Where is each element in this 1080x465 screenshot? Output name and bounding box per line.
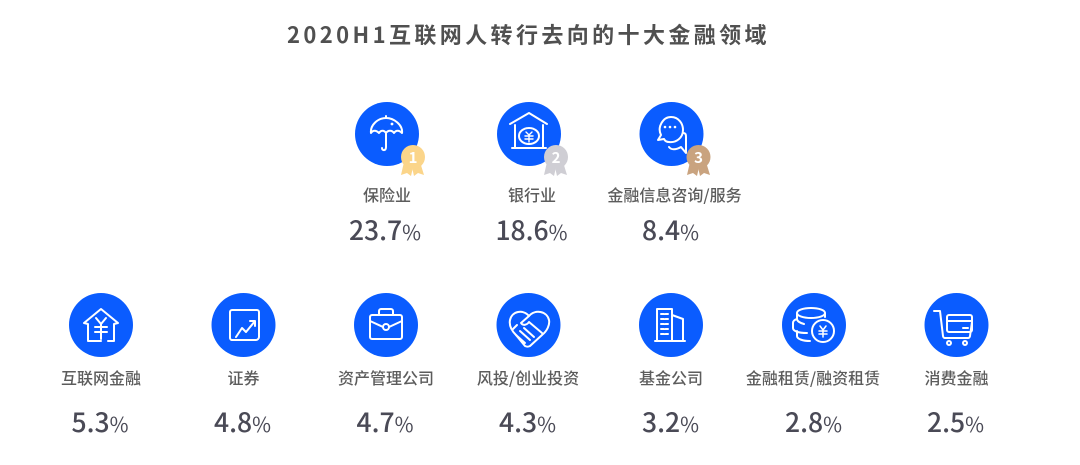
label: 互联网金融 xyxy=(61,365,141,389)
item: 证券 xyxy=(212,293,276,440)
icon: shopping cart xyxy=(924,293,988,357)
value: 23.7% xyxy=(349,209,421,248)
icon: briefcase xyxy=(354,293,418,357)
icon: stock chart xyxy=(212,293,276,357)
label: 银行业 xyxy=(508,182,556,206)
label: 基金公司 xyxy=(639,365,703,389)
icon: heart handshake xyxy=(496,293,560,357)
label: 证券 xyxy=(227,365,260,389)
badge: rank 1: 1 xyxy=(409,147,417,168)
label: 风投/创业投资 xyxy=(477,365,579,389)
label: 保险业 xyxy=(363,182,411,206)
icon: building xyxy=(639,293,703,357)
item: 金融信息咨询/服务 xyxy=(607,102,742,248)
icon: chat bubbles xyxy=(640,102,704,166)
item: 银行业 xyxy=(495,102,568,248)
value: 18.6% xyxy=(495,209,568,248)
value: 4.7% xyxy=(356,401,414,440)
value: 4.8% xyxy=(214,401,271,440)
icon: coins xyxy=(782,293,846,357)
icon: house with yen xyxy=(69,293,133,357)
item: 消费金融 xyxy=(924,293,989,440)
item: 风投/创业投资 xyxy=(477,293,579,440)
item: 金融租赁/融资租赁 xyxy=(746,293,880,440)
icon: bank house xyxy=(497,102,561,166)
badge: rank 1 xyxy=(401,145,425,176)
label: 资产管理公司 xyxy=(338,365,434,389)
label: 金融信息咨询/服务 xyxy=(607,182,742,206)
value: 5.3% xyxy=(72,401,129,440)
badge: rank 3 xyxy=(686,145,710,176)
item: 保险业 xyxy=(349,102,425,248)
label: 消费金融 xyxy=(924,365,989,389)
badge: rank 2: 2 xyxy=(552,147,561,168)
value: 2.5% xyxy=(927,401,984,440)
value: 2.8% xyxy=(785,401,842,440)
item: 互联网金融 xyxy=(61,293,141,440)
badge: rank 3: 3 xyxy=(694,147,703,168)
badge: rank 2 xyxy=(544,145,568,176)
label: 金融租赁/融资租赁 xyxy=(746,365,880,389)
value: 3.2% xyxy=(642,401,699,440)
item: 基金公司 xyxy=(639,293,703,440)
icon: umbrella xyxy=(355,102,419,166)
item: 资产管理公司 xyxy=(338,293,434,440)
value: 4.3% xyxy=(499,401,556,440)
title: 2020H1互联网人转行去向的十大金融领域 xyxy=(287,18,770,50)
value: 8.4% xyxy=(642,209,699,248)
